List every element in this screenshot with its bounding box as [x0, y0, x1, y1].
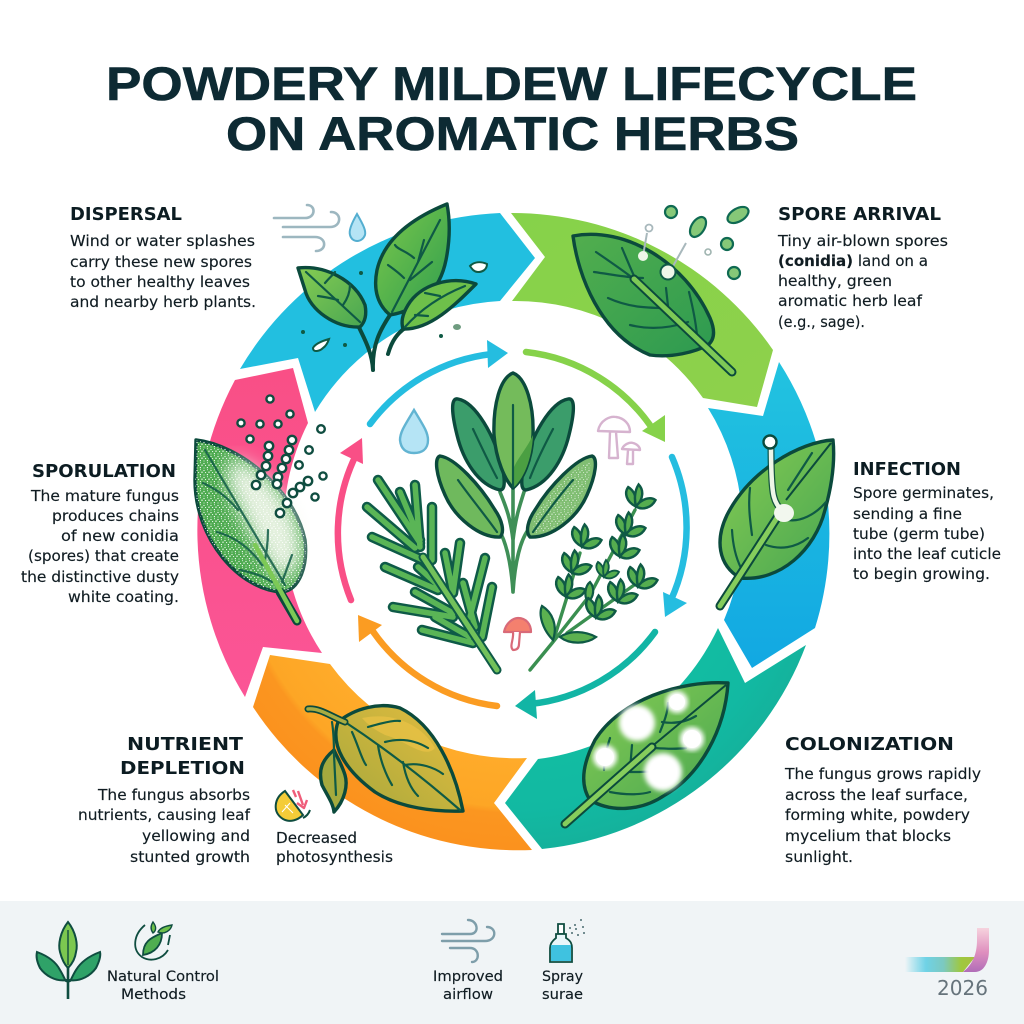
title	[106, 57, 917, 160]
center herb: sage	[437, 373, 595, 592]
text: improved airflow	[433, 969, 503, 1003]
ring segment: spore arrival	[511, 213, 773, 407]
plant: dispersal	[298, 204, 476, 370]
text: colonization: across the leaf surface,	[785, 786, 968, 804]
text: sporulation: white coating.	[68, 588, 179, 606]
icon: lemon and down arrow	[276, 790, 310, 821]
text: colonization: forming white, powdery	[785, 806, 970, 824]
text: spore arrival: (e.g., sage).	[778, 313, 865, 331]
leaf: infection	[720, 436, 834, 606]
arrow: infection to colonization	[663, 457, 687, 617]
icon: leaf in circular arrow	[135, 922, 172, 960]
text: natural control methods: Methods	[121, 987, 186, 1003]
footer band	[0, 901, 1024, 1024]
arrow: arrival to infection	[526, 352, 665, 442]
swoosh logo	[905, 928, 989, 972]
leaf: colonization	[565, 683, 728, 824]
spores landing	[638, 204, 751, 280]
icon: water drop center	[400, 410, 428, 453]
text: spore arrival: aromatic herb leaf	[778, 292, 923, 310]
text: spore arrival: Tiny air-blown spores	[777, 232, 948, 250]
text: colonization: The fungus grows rapidly	[784, 765, 981, 783]
icon: red mushroom	[504, 618, 531, 650]
text: colonization: sunlight.	[785, 848, 853, 866]
text: spray surae: surae	[542, 987, 583, 1003]
spores and conidia chains	[237, 395, 327, 517]
text: sporulation: of new conidia	[61, 527, 179, 545]
arrow: depletion to sporulation	[358, 615, 497, 706]
text: nutrient depletion: nutrients, causing leaf	[78, 806, 251, 824]
text: sporulation: SPORULATION	[32, 461, 176, 482]
ring segment: infection	[708, 362, 829, 668]
text: dispersal: DISPERSAL	[70, 204, 182, 225]
lifecycle ring	[197, 213, 829, 850]
text: nutrient depletion	[78, 734, 251, 866]
text: infection: sending a fine	[853, 505, 962, 523]
text: dispersal	[70, 204, 256, 311]
text: sporulation: (spores) that create	[28, 547, 179, 565]
text: dispersal: carry these new spores	[70, 253, 252, 271]
text: colonization	[784, 734, 981, 866]
text: infection: INFECTION	[853, 459, 961, 480]
text: spray surae: Spray	[542, 969, 583, 985]
text: sporulation	[21, 461, 179, 606]
arrow: colonization to depletion	[515, 632, 655, 719]
arrow: dispersal to arrival	[370, 340, 508, 424]
icon: airflow	[442, 920, 494, 962]
text: spore arrival: SPORE ARRIVAL	[778, 204, 941, 225]
ring segment: colonization	[505, 628, 806, 849]
arrow: sporulation to dispersal	[338, 438, 363, 600]
icon: footer plant	[37, 922, 100, 999]
text: spore arrival	[777, 204, 948, 331]
leaf: sporulation with white powder	[195, 440, 306, 621]
text: decreased photosynthesis	[276, 829, 393, 866]
leaf: spore arrival	[573, 234, 732, 372]
text: dispersal: and nearby herb plants.	[70, 293, 256, 311]
text: infection: Spore germinates,	[853, 484, 994, 502]
text: infection	[853, 459, 1001, 583]
title: ON AROMATIC HERBS	[226, 107, 799, 160]
center herb: thyme	[530, 484, 658, 670]
icon: pale mushrooms	[598, 417, 640, 464]
text: spore arrival: healthy, green	[778, 272, 892, 290]
text: sporulation: the distinctive dusty	[21, 568, 179, 586]
text: nutrient depletion: yellowing and	[142, 827, 250, 845]
text: year: 2026	[937, 976, 988, 1000]
text: colonization: COLONIZATION	[785, 734, 954, 755]
text: colonization: mycelium that blocks	[785, 827, 951, 845]
center herb: rosemary	[367, 480, 497, 670]
text: infection: to begin growing.	[853, 565, 990, 583]
text: nutrient depletion: NUTRIENT	[127, 734, 244, 755]
text: decreased photosynthesis: Decreased	[276, 829, 357, 847]
text: nutrient depletion: stunted growth	[130, 848, 250, 866]
text: sporulation: The mature fungus	[30, 487, 179, 505]
icon: wind and droplets, dispersal	[274, 205, 487, 351]
text: spore arrival: (conidia) land on a	[778, 252, 928, 270]
text: improved airflow: Improved	[433, 969, 503, 985]
text: spray surae	[542, 969, 583, 1003]
text: nutrient depletion: The fungus absorbs	[97, 786, 250, 804]
ring segment: sporulation	[197, 368, 322, 697]
title: POWDERY MILDEW LIFECYCLE	[106, 57, 917, 110]
small drooping leaf	[320, 750, 346, 812]
text: improved airflow: airflow	[443, 987, 493, 1003]
text: natural control methods	[107, 969, 219, 1003]
text: infection: into the leaf cuticle	[853, 545, 1001, 563]
ring segment: dispersal	[240, 213, 535, 412]
icon: spray bottle	[550, 919, 585, 962]
text: sporulation: produces chains	[52, 507, 179, 525]
text: decreased photosynthesis: photosynthesis	[276, 848, 393, 866]
text: infection: tube (germ tube)	[853, 525, 985, 543]
text: dispersal: to other healthy leaves	[70, 273, 250, 291]
text: dispersal: Wind or water splashes	[70, 232, 255, 250]
leaf: yellowing nutrient depletion	[308, 706, 463, 812]
ring segment: nutrient depletion	[253, 655, 532, 850]
text: natural control methods: Natural Control	[107, 969, 219, 985]
inner cycle arrows	[338, 340, 687, 719]
text: nutrient depletion: DEPLETION	[120, 758, 245, 779]
